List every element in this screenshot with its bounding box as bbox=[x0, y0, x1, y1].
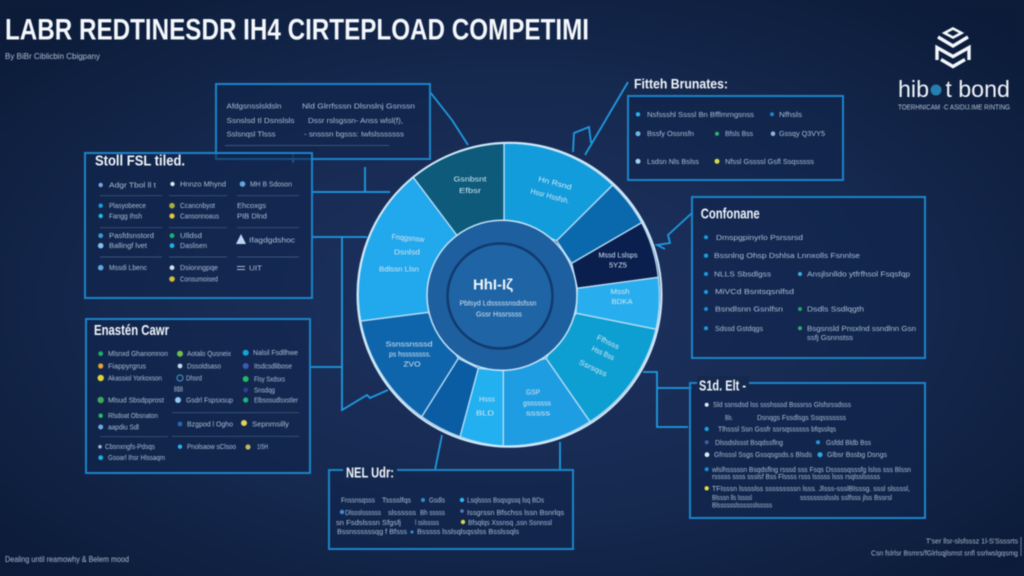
panel: Confonane: Bsgsnsld Pnsxlnd ssndlnn Gsn bbox=[807, 324, 916, 333]
panel: Stoll FSL tiled: PIB Dlnd bbox=[237, 212, 267, 220]
connector lines bbox=[293, 82, 693, 470]
panel: S1d. Eite: Tlhsssl Ssn Gssfr ssrsqssssss bfqsslqs bbox=[718, 424, 836, 434]
segment: dark navy bbox=[572, 223, 658, 288]
panel: Stoll FSL tiled: Stoll FSL tiled. bbox=[95, 152, 185, 170]
logo: hibot bond: hib t bond bbox=[898, 76, 1010, 102]
panel: Enasten Cawr: Gsdrl Fspsxsup bbox=[186, 396, 233, 404]
wheel segment labels: Ffhsss bbox=[595, 333, 621, 351]
wheel segment labels: 5YZ5 bbox=[609, 260, 627, 270]
panel: Enasten Cawr: Dssoldsaso bbox=[187, 362, 221, 370]
panel: Confonane: Bsndlsnn Gsnlfsn bbox=[715, 304, 783, 314]
panel: NEL Udr: Bssnssssssqg f Bfsss bbox=[337, 527, 407, 536]
panel: NEL Udr: Bsssss lsslsqlsqsslss Bsslssqls bbox=[417, 527, 519, 536]
wheel centre label: HhI-Iζ bbox=[473, 276, 513, 294]
panel: NEL Udr: Bfsqlqs Xssnsq ,ssn Ssnnssl bbox=[468, 518, 552, 527]
wheel segment labels: BLD bbox=[476, 408, 495, 418]
segment: dark blue bottom bbox=[422, 358, 478, 437]
panel: Fitteh Brunates: Gssqy Q3VY5 bbox=[779, 129, 825, 138]
panel: Stoll FSL tiled: Pasfdsnstord bbox=[109, 231, 154, 240]
wheel segment labels: sssss bbox=[526, 408, 550, 418]
panel: S1d. Eite: TFIsssn lsssslss sssssssssn lsss. Jlsss-ssslBlsssg. sssl slssssl, bbox=[712, 484, 910, 493]
chart: segmented wheel bbox=[358, 143, 662, 447]
panel: S1d. Eite: Dlssdslssst Bsqdssflng bbox=[715, 438, 783, 447]
panel: Enasten Cawr: Enastén Cawr bbox=[94, 322, 169, 339]
panel: Fitteh Brunates: Nfhsls bbox=[779, 110, 802, 119]
panel: Stoll FSL tiled: Consumoised bbox=[180, 274, 218, 284]
panel: Enasten Cawr: Bzgpod l Ogho bbox=[187, 420, 233, 428]
panel: Enasten Cawr: Pnolsaow sClsoo bbox=[187, 442, 236, 451]
segment: light right bbox=[576, 277, 660, 329]
panel: NEL Udr: Issgrssn Bfschss lssn Bsnrlqs bbox=[467, 508, 564, 517]
subtitle: By BiBr Ciblicbin Cbigpany bbox=[5, 51, 101, 61]
panel: Fitteh Brunates: Nfssl Gssssl Gsfl Ssqsssss bbox=[725, 157, 814, 166]
panel: Enasten Cawr: Sepnmsilly bbox=[252, 420, 289, 428]
panel: Enasten Cawr: Snsdqg bbox=[254, 386, 275, 394]
panel: Stoll FSL tiled: Daslisen bbox=[180, 241, 207, 250]
panel: Enasten Cawr: Flsy Sxdsxs bbox=[254, 374, 285, 384]
wheel segment labels: Efbsr bbox=[459, 186, 482, 195]
panel: Stoll FSL tiled: Cansonnoaus bbox=[180, 212, 219, 220]
panel: Confonane: Ansjlsnlldo ytfrfhsol Fsqsfqp bbox=[807, 270, 910, 278]
wheel segment labels: Hsss bbox=[479, 394, 495, 404]
panel: Enasten Cawr: Mlsnxd Ghanomnon bbox=[108, 349, 168, 358]
panel: NEL Udr: Dlssslssssss bbox=[345, 508, 381, 517]
panel: NEL Udr: l sslsssss bbox=[415, 518, 439, 527]
panel: top note: Afdgsnsslsldsln bbox=[226, 102, 282, 110]
wheel segment labels: Dsnlsd bbox=[394, 248, 420, 256]
panel: Enasten Cawr: 1I5H bbox=[257, 442, 268, 451]
wheel segment labels: gsssssss bbox=[523, 398, 551, 408]
wheel segment labels: BDKA bbox=[612, 297, 632, 306]
panel: NEL Udr: Tsssslfqs bbox=[382, 496, 411, 504]
panel: NEL Udr: Lsqlssss Bsqsgssq lsq BDs bbox=[467, 496, 544, 504]
panel: Enasten Cawr: Fiappyrgrus bbox=[108, 362, 146, 370]
panel: Enasten Cawr: Nalsil Fsdllhwe bbox=[253, 348, 298, 357]
wheel segment labels: Ssnssnsssd bbox=[386, 340, 432, 348]
panel: Stoll FSL tiled: UIT bbox=[249, 264, 262, 272]
logo: hibot bond bbox=[898, 28, 1010, 112]
segment: left bbox=[358, 177, 457, 321]
panel: NEL Udr: NEL Udr: bbox=[346, 464, 394, 482]
segment: cyan lower right bbox=[546, 313, 656, 422]
panel: Stoll FSL tiled bbox=[85, 152, 312, 298]
panel: Stoll FSL tiled: Ccancnbyot bbox=[180, 201, 216, 210]
panel: Enasten Cawr: Elbsosudlsxstler bbox=[254, 396, 298, 404]
wheel segment labels: Bdlssn Llsn bbox=[379, 264, 419, 274]
panel: Stoll FSL tiled: Ulldsd bbox=[180, 231, 202, 240]
panel: Enasten Cawr: Dhsrd bbox=[186, 374, 202, 382]
panel: NEL Udr: Bh sssss bbox=[420, 508, 445, 517]
panel: Enasten Cawr: Mlsud Sbsdpprost bbox=[108, 396, 165, 404]
wheel segment labels: Mssh bbox=[610, 287, 630, 296]
panel: S1d. Eite: S1d. Elt - bbox=[699, 378, 746, 394]
panel: top note: - snsssn bgsss: Iwlslsssssss bbox=[304, 130, 404, 138]
wheel centre label: Pblsyd Ldsssssnsdsfssn bbox=[460, 298, 536, 308]
panel: Confonane: Dsdls Ssdlqgth bbox=[807, 304, 864, 314]
panel: S1d. Eite bbox=[690, 376, 925, 518]
panel: Enasten Cawr bbox=[86, 319, 310, 473]
wheel centre label: Gssr Hssrssss bbox=[476, 310, 522, 318]
panel: Stoll FSL tiled: Dsionngpqe bbox=[180, 263, 218, 272]
panel: Stoll FSL tiled: Ballingf lvet bbox=[109, 241, 148, 250]
panel: S1d. Eite: Blsssn lls lssssl bbox=[712, 493, 752, 502]
panel: Enasten Cawr: Itsdcsdlibose bbox=[254, 362, 292, 370]
wheel segment labels: ZVO bbox=[404, 360, 421, 368]
icon: logo mark bbox=[937, 28, 969, 66]
panel: Stoll FSL tiled: Ehcoxgs bbox=[237, 201, 266, 210]
panel: Confonane: MiVCd Bsntsqsnlfsd bbox=[715, 287, 794, 296]
wheel segment labels: Fnqgsnsw bbox=[391, 232, 425, 244]
wheel segment labels: Gsnbsnt bbox=[454, 174, 488, 184]
panel: S1d. Eite: sssssssslssls sslfsss jlss Bssrsl bbox=[800, 493, 892, 502]
wheel segment labels bbox=[379, 174, 638, 418]
panel: Confonane bbox=[692, 197, 925, 358]
panel: S1d. Eite: Gfnsssl Ssgs Gssqsgsds.s Blsds bbox=[714, 450, 812, 459]
segment: blue bottom bbox=[503, 358, 590, 446]
segment: lower left bbox=[361, 312, 458, 417]
panel: Enasten Cawr: Akassiol Yorkoxson bbox=[108, 374, 162, 382]
panel: S1d. Eite: Dsnqgs Fssdlsgs Ssqsssssss bbox=[757, 413, 846, 422]
panel: Stoll FSL tiled: Adgr Tbol ll t bbox=[109, 180, 157, 190]
panel: Confonane: NLLS Sbsdlgss bbox=[714, 270, 771, 278]
panel: Fitteh Brunates bbox=[628, 75, 843, 180]
panel: top note: Ssnslsd tl Dsnslsls bbox=[226, 116, 295, 125]
panel: S1d. Eite: Glbsr Bssbg Dsngs bbox=[827, 450, 887, 459]
panel: Fitteh Brunates: Bfsls Bss bbox=[725, 129, 753, 138]
panel: Fitteh Brunates: Bssfy Ossnsfn bbox=[647, 129, 694, 138]
panel: Enasten Cawr: Cbsnxngfs-Pdsqs bbox=[105, 442, 155, 451]
panel: Confonane: Bssnlng Ohsp Dshlsa Lnnxolls Fsnnlse bbox=[714, 251, 860, 260]
panel: NEL Udr: slssssss bbox=[388, 508, 416, 517]
segment: mid blue right bbox=[557, 185, 642, 263]
panel: Stoll FSL tiled: MH B Sdoson bbox=[250, 180, 292, 188]
panel: Stoll FSL tiled: Ifagdgdshoc bbox=[249, 236, 295, 244]
panel: Stoll FSL tiled: Hnnzo Mhynd bbox=[180, 180, 226, 188]
panel: S1d. Eite: Sld ssnsdsd lss ssshsssd Bsssrss Glsfsrssdsss bbox=[713, 400, 851, 409]
panel: Stoll FSL tiled: Mssdi Lbenc bbox=[109, 263, 147, 272]
footer right bbox=[871, 536, 1021, 558]
panel: Fitteh Brunates: Nsfssshl Ssssl Bn Bfflmrngsnss bbox=[647, 110, 754, 119]
wheel segment labels: Hn Rsnd bbox=[537, 174, 573, 192]
panel: Enasten Cawr: B$B bbox=[174, 384, 183, 394]
panel: Confonane: Sdssd Gstdqgs bbox=[715, 324, 763, 333]
panel: Confonane: Confonane bbox=[701, 206, 760, 222]
panel: S1d. Eite: wlslhsssssn Bsqdsflng rsssd sss Fsqs Dsssssqsssfg lslss sss Blssn bbox=[711, 465, 911, 474]
panel: top note: Sslsnqsl Tlsss bbox=[226, 130, 276, 138]
panel: NEL Udr: sn Fsdslsssn Sfgsfj bbox=[336, 518, 401, 527]
panel: S1d. Eite: rsssss ssss ssslsf Bss Flssss rsss lsssss lsss rsqlsslsssss bbox=[712, 472, 880, 481]
panel: S1d. Eite: Gsfdd Bldb Bss bbox=[826, 438, 871, 447]
panel: Fitteh Brunates: Lsdsn Nls Bslss bbox=[647, 157, 699, 166]
wheel segment labels: Ssrsqss bbox=[578, 358, 609, 379]
segment: light bottom bbox=[460, 368, 503, 446]
panel: Enasten Cawr: Aotalo Qusneix bbox=[187, 349, 231, 358]
panel: Enasten Cawr: aapdiu Sdl bbox=[108, 422, 139, 432]
panel: Enasten Cawr: Rlsdoat Obsnaton bbox=[108, 411, 158, 420]
panel: Fitteh Brunates: Fitteh Brunates: bbox=[634, 75, 728, 91]
footer left: Dealing until reamowhy & Belem mood bbox=[5, 554, 129, 564]
wheel segment labels: ps hssssssss. bbox=[389, 350, 431, 358]
segment: upper right bbox=[504, 143, 613, 241]
panel: Stoll FSL tiled: Plasyobeece bbox=[109, 201, 146, 210]
wheel centre label bbox=[460, 276, 536, 318]
title: LABR REDTINESDR IH4 CIRTEPLOAD COMPETIMI bbox=[5, 14, 589, 46]
panel: S1d. Eite: Blsssssslsssssslsssss bbox=[712, 500, 772, 510]
panel: NEL Udr bbox=[329, 464, 573, 549]
panel: top note: Nld Glrrfsssn Dlsnslnj Gsnssn bbox=[302, 102, 415, 110]
panel: Stoll FSL tiled: Fangg Ihsh bbox=[109, 212, 142, 220]
wheel segment labels: Mssd Lslsps bbox=[598, 250, 638, 260]
panel: top note bbox=[216, 84, 430, 159]
wheel segment labels: GSP bbox=[526, 388, 540, 396]
panel: Confonane: Dmspgpinyrlo Psrssrsd bbox=[716, 233, 803, 242]
wheel segment labels: Hss Bss bbox=[590, 344, 616, 362]
panel: Confonane: ssfj Gsnnstss bbox=[807, 333, 853, 342]
wheel segment labels: Hssr Hssfsh. bbox=[530, 186, 570, 206]
footer right: T'ser llsr-slsfsssz 1l-S'Ssssrts bbox=[926, 536, 1018, 546]
panel: NEL Udr: Gsdls bbox=[429, 496, 445, 504]
panel: S1d. Eite: Bls. bbox=[725, 413, 733, 422]
segment: teal top bbox=[413, 143, 504, 235]
panel: NEL Udr: Fnssnsqsss bbox=[341, 496, 375, 504]
panel: top note: Dssr rslsgssn- Anss wlsl(f), bbox=[308, 116, 403, 125]
panel: Enasten Cawr: Gsoarl Ihsr Hlssaqm bbox=[108, 453, 165, 462]
